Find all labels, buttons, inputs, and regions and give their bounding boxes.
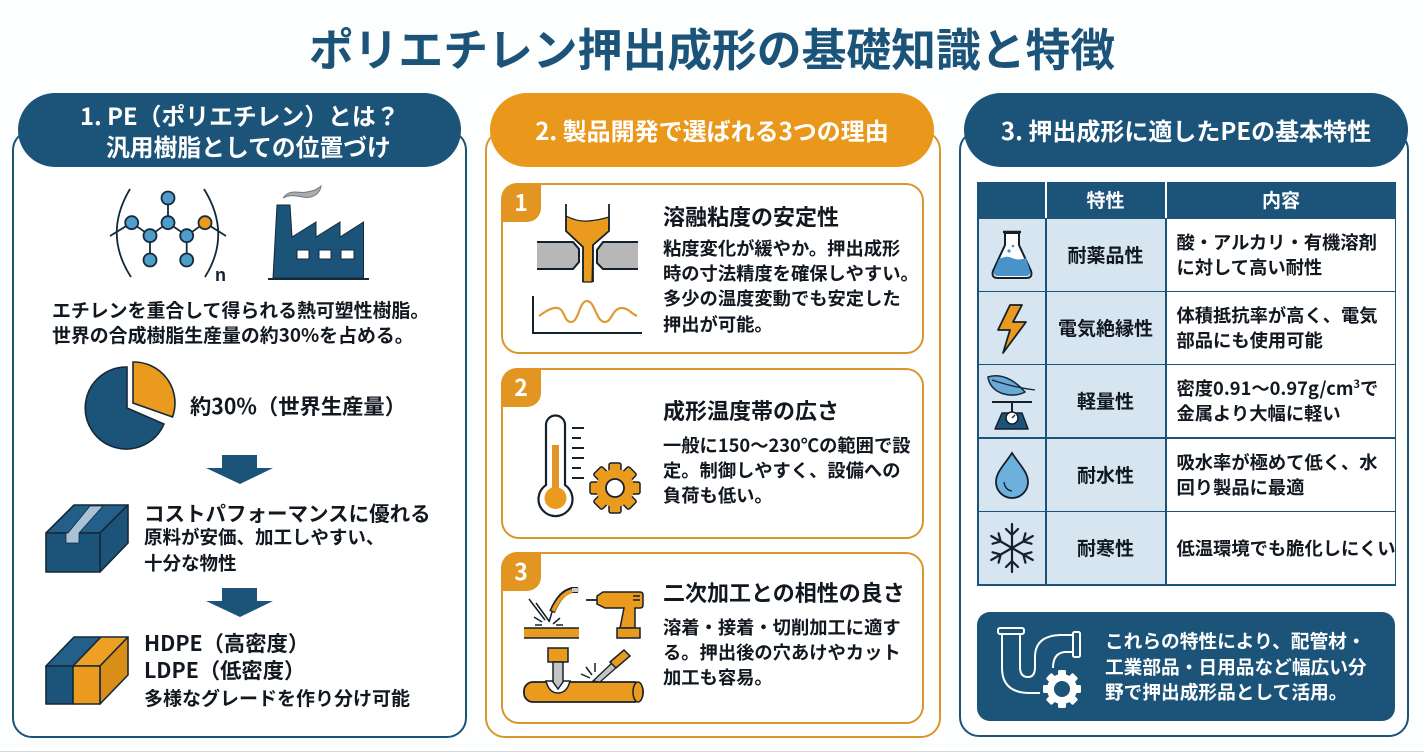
panel heading: PE overview: 1. PE（ポリエチレン）とは？ xyxy=(80,97,399,132)
row: water resistance xyxy=(979,439,1395,511)
panel heading: properties xyxy=(964,93,1408,167)
icon: lightning bolt xyxy=(997,304,1027,354)
icon: flask xyxy=(992,230,1032,279)
icon: melt viscosity xyxy=(532,204,642,334)
panel: PE overview xyxy=(12,130,467,738)
badge 2: 2 xyxy=(514,369,528,403)
text: PE description: 世界の合成樹脂生産量の約30%を占める。 xyxy=(52,321,414,348)
row: electrical insulation xyxy=(979,292,1395,364)
table header: 特性 xyxy=(1086,186,1124,213)
bottom edge line xyxy=(0,751,1424,752)
card 2 text xyxy=(663,432,911,508)
table: properties xyxy=(977,182,1396,586)
row: cold resistance: 耐寒性 xyxy=(1077,534,1134,561)
arrow 2 xyxy=(206,588,273,617)
arrow 1 xyxy=(206,455,273,484)
row: chemical resistance: 耐薬品性 xyxy=(1067,241,1144,268)
card 1 xyxy=(501,183,924,354)
callout text: これらの特性により、配管材・ xyxy=(1105,627,1366,654)
icon: box xyxy=(45,504,129,573)
card 1 heading: 溶融粘度の安定性 xyxy=(663,200,839,232)
row: cold resistance xyxy=(979,512,1396,584)
icon: feather on scale xyxy=(987,375,1035,430)
row: electrical insulation: 電気絶縁性 xyxy=(1058,314,1153,341)
badge 1: 1 xyxy=(514,184,528,218)
icon: water drop xyxy=(995,452,1029,499)
card 3 xyxy=(501,552,924,724)
card 2 text: 負荷も低い。 xyxy=(663,482,773,508)
card 3 text: 溶着・接着・切削加工に適す xyxy=(663,614,901,640)
text: grades: HDPE（高密度） xyxy=(144,627,309,658)
badge 2 xyxy=(501,368,541,407)
icon: secondary processing tools xyxy=(523,587,644,703)
table header: 内容 xyxy=(1262,186,1300,213)
card 3 text: る。押出後の穴あけやカット xyxy=(663,639,901,665)
card 2 text: 定。制御しやすく、設備への xyxy=(663,457,900,483)
icon: snowflake xyxy=(990,522,1034,574)
icon: factory xyxy=(268,184,369,280)
text: grades xyxy=(144,627,410,711)
panel heading: properties: 3. 押出成形に適したPEの基本特性 xyxy=(1001,112,1371,147)
callout text: 野で押出成形品として活用。 xyxy=(1105,678,1347,705)
panel heading: PE overview: 汎用樹脂としての位置づけ xyxy=(106,128,391,163)
text: grades: 多様なグレードを作り分け可能 xyxy=(144,684,410,711)
row: light weight: 密度0.91～0.97g/cm3で xyxy=(1176,375,1378,401)
card 1 text: 押出が可能。 xyxy=(663,311,773,337)
icon: HDPE LDPE block xyxy=(45,636,129,705)
text: cost performance: 原料が安価、加工しやすい、 xyxy=(144,524,384,550)
table header xyxy=(977,182,1396,218)
card 2 heading: 成形温度帯の広さ xyxy=(663,394,839,426)
row: chemical resistance: 酸・アルカリ・有機溶剤 xyxy=(1176,229,1377,255)
row: water resistance: 回り製品に最適 xyxy=(1176,474,1304,500)
panel: properties xyxy=(959,130,1409,737)
callout xyxy=(977,612,1395,721)
chart: pie 30 percent xyxy=(84,361,176,450)
card 1 text xyxy=(663,235,919,337)
row: water resistance: 吸水率が極めて低く、水 xyxy=(1176,449,1378,475)
card 1 text: 多少の温度変動でも安定した xyxy=(663,285,901,311)
row: electrical insulation: 部品にも使用可能 xyxy=(1176,327,1323,353)
title: ポリエチレン押出成形の基礎知識と特徴 xyxy=(309,14,1115,79)
callout text xyxy=(1105,627,1367,705)
card 2 text: 一般に150～230℃の範囲で設 xyxy=(663,432,911,458)
card 2 xyxy=(501,368,924,539)
badge 1 xyxy=(501,183,541,222)
card 1 text: 粘度変化が緩やか。押出成形 xyxy=(663,235,900,261)
text: PE description xyxy=(52,296,429,348)
panel: reasons xyxy=(485,130,941,738)
pie label: 約30%（世界生産量） xyxy=(190,390,406,421)
text: PE description: エチレンを重合して得られる熱可塑性樹脂。 xyxy=(52,296,429,323)
card 3 text xyxy=(663,614,901,690)
icon: pipe and gear xyxy=(997,627,1081,708)
icon: polymer molecule: n xyxy=(215,265,226,285)
row: cold resistance: 低温環境でも脆化しにくい xyxy=(1176,535,1396,561)
row: light weight: 軽量性 xyxy=(1077,387,1134,414)
text: cost performance xyxy=(144,497,431,576)
callout text: 工業部品・日用品など幅広い分 xyxy=(1105,652,1367,680)
row: light weight: 金属より大幅に軽い xyxy=(1176,400,1341,426)
panel heading: reasons xyxy=(490,93,934,167)
text: grades: LDPE（低密度） xyxy=(144,654,305,685)
icon: polymer molecule xyxy=(110,188,226,285)
icon: thermometer and gear xyxy=(537,414,641,518)
badge 3: 3 xyxy=(514,553,528,587)
row: chemical resistance xyxy=(979,219,1395,291)
card 3 heading: 二次加工との相性の良さ xyxy=(663,576,905,608)
card 1 text: 時の寸法精度を確保しやすい。 xyxy=(663,260,919,286)
text: cost performance: コストパフォーマンスに優れる xyxy=(144,497,431,527)
text: cost performance: 十分な物性 xyxy=(144,550,237,576)
badge 3 xyxy=(501,552,541,591)
panel heading: PE overview xyxy=(18,93,461,167)
row: chemical resistance: に対して高い耐性 xyxy=(1176,254,1322,280)
row: water resistance: 耐水性 xyxy=(1077,461,1134,488)
card 3 text: 加工も容易。 xyxy=(663,664,773,690)
row: electrical insulation: 体積抵抗率が高く、電気 xyxy=(1176,302,1378,328)
panel heading: reasons: 2. 製品開発で選ばれる3つの理由 xyxy=(535,112,889,147)
row: light weight xyxy=(979,365,1395,437)
